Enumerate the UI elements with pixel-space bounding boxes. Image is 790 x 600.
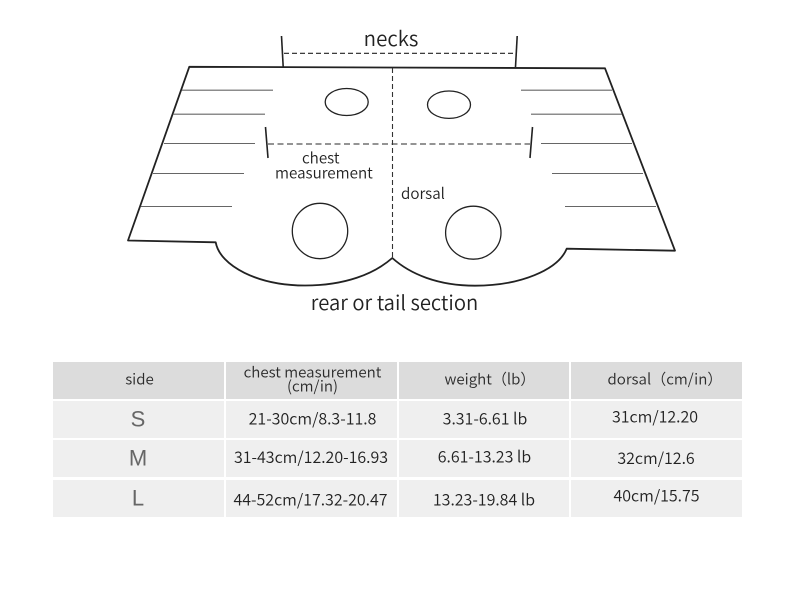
label: dorsal: dorsal [401, 182, 445, 204]
header row: side [125, 368, 154, 390]
label: chest measurement: measurement [275, 162, 373, 184]
row S: 31cm/12.20 [612, 404, 698, 428]
chest measurement marker [266, 127, 532, 158]
row M: 31-43cm/12.20-16.93 [234, 444, 388, 468]
row L: 13.23-19.84 lb [433, 486, 535, 510]
row S [53, 401, 742, 438]
header row: dorsal（cm/in） [608, 368, 722, 390]
row M: M [129, 446, 147, 470]
neck measurement marker [282, 36, 517, 67]
row S: 3.31-6.61 lb [443, 406, 527, 430]
row L [53, 480, 742, 517]
row L: 40cm/15.75 [613, 482, 700, 506]
upper leg holes [325, 88, 470, 118]
header row: (cm/in) [287, 374, 338, 396]
label: necks: necks [364, 22, 418, 52]
header row: chest measurement [244, 360, 381, 382]
garment outline [128, 67, 675, 286]
size table [53, 360, 742, 517]
row M: 32cm/12.6 [617, 445, 695, 469]
row M: 6.61-13.23 lb [438, 444, 531, 468]
row M [53, 440, 742, 477]
strap lines: right side [521, 90, 656, 206]
diagram: garment flat pattern [128, 22, 675, 316]
row S: 21-30cm/8.3-11.8 [249, 406, 377, 430]
label: rear or tail section: rear or tail section [311, 287, 478, 316]
row L: L [132, 486, 144, 510]
row S: S [131, 406, 145, 432]
strap lines: left side [141, 90, 273, 206]
header row [53, 360, 742, 399]
header row: weight（lb） [444, 368, 536, 390]
row L: 44-52cm/17.32-20.47 [233, 486, 388, 510]
label: chest measurement: chest [302, 146, 339, 168]
dorsal centre line [392, 68, 394, 258]
lower leg holes [292, 203, 501, 259]
